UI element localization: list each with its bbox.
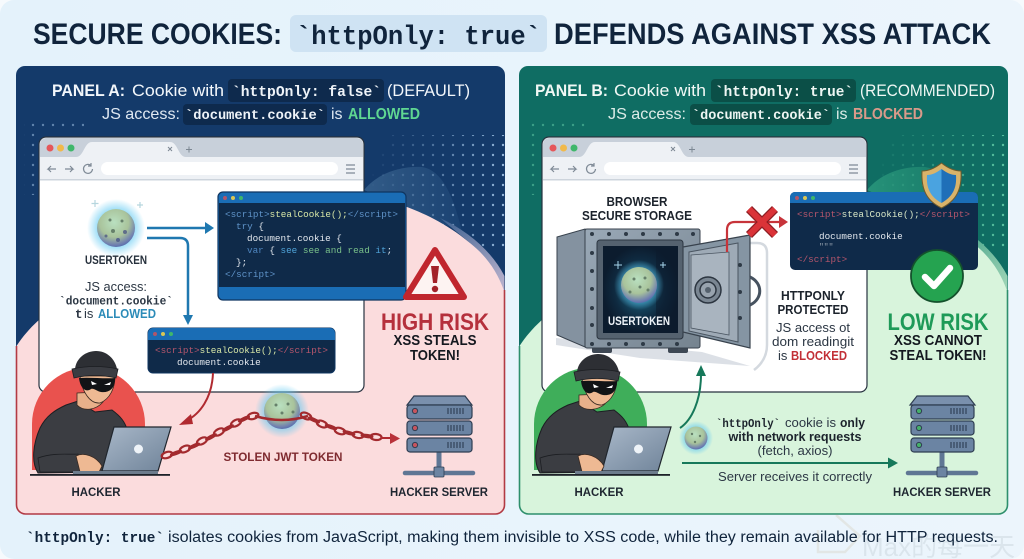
hacker B: HACKER xyxy=(574,485,624,499)
panel A heading: Cookie with xyxy=(132,81,224,100)
code window: stealCookie xyxy=(218,192,406,300)
stolen token chain: STOLEN JWT TOKEN xyxy=(224,450,342,464)
high risk text xyxy=(381,309,490,364)
panel B heading: JS access: xyxy=(608,106,686,123)
panel B heading: is xyxy=(836,106,848,123)
icon: shield xyxy=(922,163,961,208)
text: JS access allowed: ALLOWED xyxy=(98,306,156,321)
icon: vault safe xyxy=(556,229,760,366)
text: JS access allowed: is xyxy=(84,306,94,321)
text: httponly protected: HTTPONLY xyxy=(781,289,846,303)
icon: cookie small xyxy=(679,421,713,455)
text: JS access allowed: t xyxy=(75,308,83,322)
panel B heading: Cookie with xyxy=(614,81,706,100)
panel A: httpOnly false xyxy=(16,66,505,514)
code window: stealCookie: var { see see and read it; xyxy=(247,245,392,256)
text: network requests: (fetch, axios) xyxy=(758,443,832,458)
text: server receives: Server receives it correctly xyxy=(718,469,872,484)
hacker A: HACKER xyxy=(72,485,121,499)
code window: stealCookie: document.cookie { xyxy=(247,233,342,244)
panel A heading: PANEL A: xyxy=(52,81,125,100)
panel A heading: `document.cookie` xyxy=(185,108,325,124)
hacker server A xyxy=(390,396,488,499)
text: httponly protected: is xyxy=(778,348,788,363)
panel B heading: (RECOMMENDED) xyxy=(860,81,995,100)
title: SECURE COOKIES: xyxy=(33,18,282,51)
title: DEFENDS AGAINST XSS ATTACK xyxy=(554,18,991,51)
title xyxy=(33,15,991,53)
code window: stealCookie: }; xyxy=(236,257,247,268)
code window: injected script xyxy=(148,328,335,373)
panel B heading: BLOCKED xyxy=(853,106,923,123)
text: httponly protected: BLOCKED xyxy=(791,348,847,363)
text: network requests xyxy=(716,415,866,458)
text: network requests: `httpOnly` xyxy=(716,417,780,431)
low risk text: XSS CANNOT xyxy=(894,332,982,349)
hacker server B: HACKER SERVER xyxy=(893,485,991,499)
arrow: token to injected script xyxy=(147,238,193,325)
bracket xyxy=(748,243,767,370)
text: httponly protected: JS access ot xyxy=(776,320,850,335)
watermark xyxy=(818,515,1015,559)
code window: blocked script xyxy=(790,192,978,270)
text: httponly protected xyxy=(772,289,854,363)
code window: stealCookie: </script> xyxy=(225,269,276,280)
code window: stealCookie: <script>stealCookie();</script> xyxy=(225,209,398,220)
high risk text: XSS STEALS xyxy=(394,332,476,349)
icon: usertoken cookie: USERTOKEN xyxy=(85,255,147,267)
text: network requests: only xyxy=(840,415,866,430)
footer note: `httpOnly: true` xyxy=(26,530,164,547)
hacker A xyxy=(30,351,171,499)
text: JS access allowed xyxy=(59,279,173,322)
text: network requests: cookie is xyxy=(785,415,837,430)
red blocked arrow with X xyxy=(727,209,788,252)
heading: browser secure storage: BROWSER xyxy=(606,195,668,209)
text: httponly protected: dom readingit xyxy=(772,334,854,349)
text: JS access allowed: JS access: xyxy=(85,279,147,294)
text: network requests: with network requests xyxy=(728,429,862,444)
high risk text: TOKEN! xyxy=(410,347,460,364)
hacker server A: HACKER SERVER xyxy=(390,485,488,499)
low risk text: STEAL TOKEN! xyxy=(890,347,986,364)
browser window B xyxy=(542,137,867,392)
panel A heading: `httpOnly: false` xyxy=(232,85,381,101)
high risk text: HIGH RISK xyxy=(381,309,490,336)
hacker B xyxy=(532,354,671,499)
code window: injected script: document.cookie xyxy=(177,357,261,368)
panel B heading: `httpOnly: true` xyxy=(715,85,853,101)
heading: browser secure storage xyxy=(582,195,692,223)
text: httponly protected: PROTECTED xyxy=(778,303,848,317)
arrow: up to browser xyxy=(680,365,706,428)
stolen token chain xyxy=(161,384,400,464)
panel B heading xyxy=(535,79,995,125)
arrow: script to hacker xyxy=(179,373,213,425)
arrow: to server xyxy=(682,458,898,468)
panel B heading: PANEL B: xyxy=(535,81,608,100)
icon: green check xyxy=(911,250,963,302)
icon: vault safe: USERTOKEN xyxy=(608,316,670,328)
code window: injected script: <script>stealCookie();</script> xyxy=(155,345,328,356)
browser window A xyxy=(39,137,364,392)
panel A heading: (DEFAULT) xyxy=(387,81,470,100)
code window: blocked script: <script>stealCookie();</script> xyxy=(797,209,970,220)
panel B: httpOnly true xyxy=(519,66,1008,514)
icon: usertoken cookie xyxy=(85,199,147,267)
arrow: token to script xyxy=(147,222,214,234)
text: JS access allowed: `document.cookie` xyxy=(59,294,173,308)
code window: stealCookie: try { xyxy=(236,221,264,232)
hacker server B xyxy=(893,396,991,499)
heading: browser secure storage: SECURE STORAGE xyxy=(582,209,692,223)
low risk text: LOW RISK xyxy=(888,309,989,336)
panel A heading: is xyxy=(331,106,343,123)
code window: blocked script: document.cookie xyxy=(819,231,903,242)
code window: blocked script: """ xyxy=(819,243,833,252)
panel A heading xyxy=(52,79,470,125)
warning icon xyxy=(406,250,464,297)
low risk text xyxy=(888,309,989,364)
panel A heading: JS access: xyxy=(102,106,180,123)
title: `httpOnly: true` xyxy=(296,23,541,53)
footer note: isolates cookies from JavaScript, making them invisible to XSS code, while they remain available for HTTP requests. xyxy=(168,529,998,546)
panel B heading: `document.cookie` xyxy=(692,108,830,124)
code window: blocked script: </script> xyxy=(797,254,848,265)
panel A heading: ALLOWED xyxy=(348,106,420,123)
